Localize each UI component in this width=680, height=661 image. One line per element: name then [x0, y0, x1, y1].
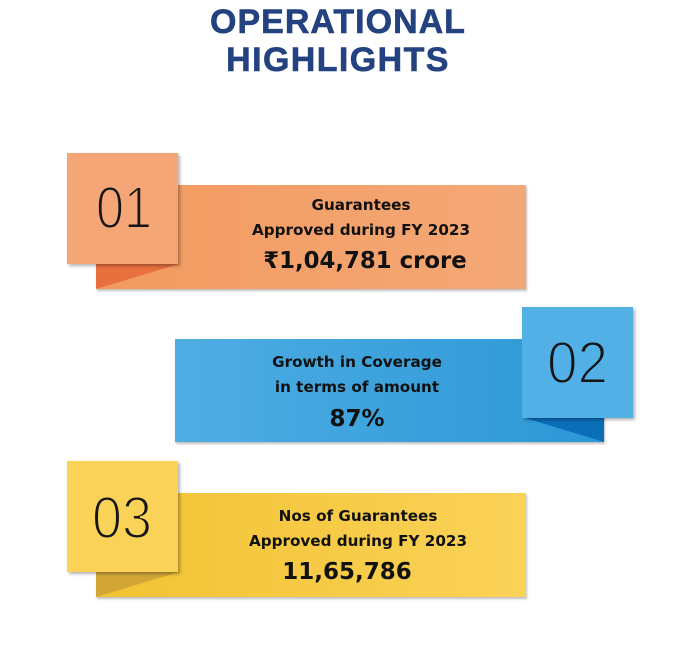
label 02 — [272, 353, 442, 396]
number box 03 — [67, 461, 178, 572]
number box 01 — [67, 153, 178, 264]
title — [210, 3, 466, 79]
number box 02 — [522, 307, 633, 418]
label 02: in terms of amount — [275, 378, 439, 396]
value 03: 11,65,786 — [282, 559, 412, 585]
title: OPERATIONAL — [210, 3, 466, 41]
label 03: Approved during FY 2023 — [249, 532, 467, 550]
fold 01 — [96, 264, 178, 289]
label 01 — [252, 196, 470, 239]
label 01: Guarantees — [312, 196, 410, 214]
number 01: 01 — [96, 175, 152, 241]
label 03: Nos of Guarantees — [279, 507, 437, 525]
fold 02 — [526, 418, 604, 442]
number 02: 02 — [547, 330, 608, 396]
label 03 — [249, 507, 467, 550]
value 01: ₹1,04,781 crore — [263, 248, 467, 274]
panel: number of guarantees — [67, 461, 528, 600]
title: HIGHLIGHTS — [226, 41, 450, 79]
value 02: 87% — [329, 406, 385, 432]
panel: growth in coverage — [175, 307, 637, 445]
label 02: Growth in Coverage — [272, 353, 442, 371]
banner 02 — [175, 339, 604, 442]
number 03: 03 — [92, 485, 152, 551]
fold 03 — [96, 572, 178, 597]
label 01: Approved during FY 2023 — [252, 221, 470, 239]
banner 03 — [96, 493, 526, 597]
banner 01 — [96, 185, 526, 289]
panel: guarantees approved — [67, 153, 528, 292]
